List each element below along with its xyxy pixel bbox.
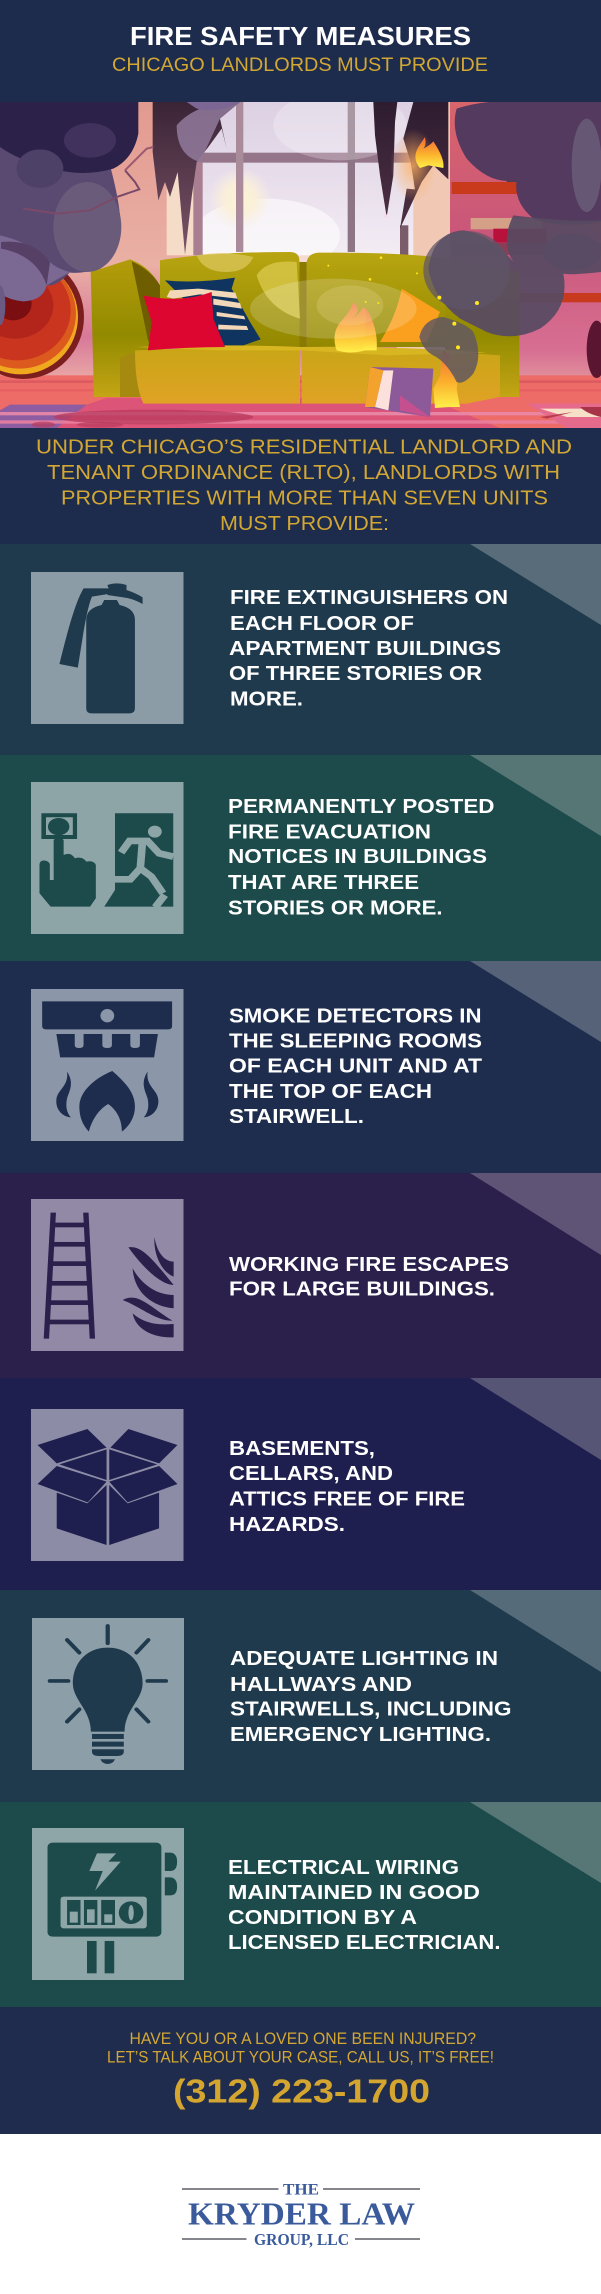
- panel: lighting: [0, 1590, 601, 1802]
- intro text: PROPERTIES WITH MORE THAN SEVEN UNITS: [61, 488, 548, 510]
- right side wall object: [587, 321, 601, 378]
- floor: [0, 375, 601, 428]
- text block: [228, 796, 494, 920]
- icon: fire extinguisher: [31, 572, 184, 724]
- icon: open box: [31, 1409, 184, 1561]
- call to action text: HAVE YOU OR A LOVED ONE BEEN INJURED?: [130, 2029, 476, 2048]
- logo: The Kryder Law Group, LLC: GROUP, LLC: [254, 2230, 349, 2249]
- hose reel: [0, 274, 84, 379]
- sofa: [91, 252, 519, 404]
- shelves and books: [452, 170, 601, 302]
- text block: NOTICES IN BUILDINGS: [228, 846, 487, 868]
- icon: alarm button and exit: [31, 782, 184, 934]
- text block: ATTICS FREE OF FIRE: [229, 1488, 465, 1510]
- intro text: MUST PROVIDE:: [220, 513, 389, 535]
- logo: The Kryder Law Group, LLC: [182, 2182, 420, 2249]
- text block: FIRE EVACUATION: [228, 822, 431, 844]
- intro panel: [0, 428, 601, 544]
- text block: HALLWAYS AND: [230, 1674, 412, 1696]
- text block: ELECTRICAL WIRING: [228, 1857, 459, 1879]
- text block: HAZARDS.: [229, 1514, 345, 1536]
- text block: STORIES OR MORE.: [228, 898, 442, 920]
- panel: smoke detectors: [0, 961, 601, 1173]
- text block: FOR LARGE BUILDINGS.: [229, 1278, 495, 1300]
- title: FIRE SAFETY MEASURES: [130, 21, 471, 51]
- text block: [230, 1648, 512, 1746]
- text block: FIRE EXTINGUISHERS ON: [230, 587, 508, 609]
- logo: The Kryder Law Group, LLC: THE: [283, 2182, 319, 2198]
- icon: ladder and flames: [31, 1199, 184, 1351]
- text block: [229, 1254, 509, 1300]
- text block: STAIRWELLS, INCLUDING: [230, 1698, 512, 1720]
- text block: LICENSED ELECTRICIAN.: [228, 1932, 500, 1954]
- text block: [229, 587, 508, 710]
- smoke: [0, 101, 601, 383]
- text block: CONDITION BY A: [228, 1907, 417, 1929]
- text block: ADEQUATE LIGHTING IN: [230, 1648, 498, 1670]
- text block: EACH FLOOR OF: [230, 613, 414, 635]
- text block: [229, 1006, 482, 1128]
- icon: smoke detector and flame: [31, 989, 184, 1141]
- logo: The Kryder Law Group, LLC: KRYDER LAW: [188, 2196, 415, 2232]
- subtitle: CHICAGO LANDLORDS MUST PROVIDE: [112, 54, 488, 76]
- text block: MAINTAINED IN GOOD: [228, 1882, 480, 1904]
- curtains: [153, 102, 448, 255]
- text block: THAT ARE THREE: [228, 872, 419, 894]
- text block: STAIRWELL.: [229, 1106, 364, 1128]
- text block: [229, 1438, 465, 1536]
- phone number: (312) 223-1700: [173, 2072, 430, 2110]
- panel: fire escapes: [0, 1173, 601, 1378]
- flames: [334, 137, 460, 408]
- text block: OF EACH UNIT AND AT: [229, 1056, 482, 1078]
- call to action panel: [0, 2007, 601, 2134]
- text block: [228, 1857, 500, 1954]
- panel: fire extinguishers: [0, 544, 601, 755]
- panel: basements and attics: [0, 1378, 601, 1590]
- text block: THE SLEEPING ROOMS: [229, 1030, 482, 1052]
- text block: WORKING FIRE ESCAPES: [229, 1254, 509, 1276]
- call to action text: LET’S TALK ABOUT YOUR CASE, CALL US, IT’S FREE!: [107, 2048, 494, 2066]
- intro text: [36, 436, 572, 535]
- text block: OF THREE STORIES OR: [229, 663, 483, 685]
- text block: BASEMENTS,: [229, 1438, 375, 1460]
- call to action text: [107, 2029, 494, 2066]
- panel: electrical wiring: [0, 1802, 601, 2007]
- icon: light bulb: [32, 1618, 184, 1770]
- pillow: fallen: [365, 367, 433, 417]
- intro text: UNDER CHICAGO’S RESIDENTIAL LANDLORD AND: [36, 436, 572, 458]
- pillow: orange: [380, 289, 440, 342]
- text block: CELLARS, AND: [229, 1463, 393, 1485]
- header panel: [0, 0, 601, 103]
- window: [193, 90, 413, 272]
- text block: APARTMENT BUILDINGS: [229, 638, 501, 660]
- text block: EMERGENCY LIGHTING.: [230, 1724, 491, 1746]
- text block: MORE.: [230, 688, 303, 710]
- text block: PERMANENTLY POSTED: [228, 796, 494, 818]
- hero illustration: burning living room: [0, 90, 601, 428]
- icon: electrical panel: [32, 1828, 184, 1980]
- pillow: navy striped: [165, 278, 261, 345]
- panel: evacuation notices: [0, 755, 601, 961]
- text block: THE TOP OF EACH: [229, 1081, 432, 1103]
- intro text: TENANT ORDINANCE (RLTO), LANDLORDS WITH: [47, 462, 560, 484]
- text block: SMOKE DETECTORS IN: [229, 1006, 482, 1028]
- pillow: red: [143, 292, 225, 350]
